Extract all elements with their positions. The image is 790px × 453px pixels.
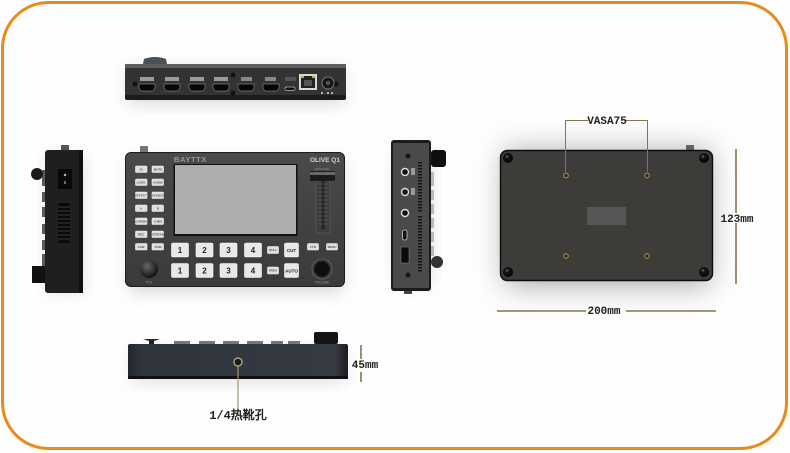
HDMI port row	[139, 77, 296, 91]
top edge keys	[174, 341, 300, 344]
tripod callout	[209, 366, 267, 423]
PTZ joystick	[140, 260, 158, 284]
T-bar fader	[310, 169, 335, 233]
USB-C port	[285, 87, 295, 90]
program and preview keys	[172, 243, 262, 278]
left button grid: CAM	[138, 245, 145, 249]
transition keys: STILL	[269, 248, 277, 252]
depth dimension 45mm	[352, 345, 379, 382]
volume knob	[314, 332, 338, 344]
program and preview keys: 2	[202, 266, 207, 276]
audio jacks	[402, 168, 408, 216]
mount holes	[564, 173, 649, 258]
screen	[174, 164, 298, 236]
top knob	[431, 150, 446, 167]
left button grid: SCENCE	[152, 194, 164, 198]
top knob	[143, 57, 167, 64]
ethernet port	[299, 74, 317, 90]
width dimension 200mm: 200mm	[587, 306, 621, 318]
device right side view	[391, 140, 446, 294]
VASA75 callout	[566, 116, 648, 172]
left button grid: B	[157, 206, 160, 210]
label plate	[587, 207, 626, 225]
USB-A port	[401, 247, 409, 263]
lower knob	[32, 266, 45, 283]
transition keys: AUTO	[285, 268, 298, 274]
program and preview keys: 4	[251, 246, 256, 255]
device rear panel with VESA mounts	[500, 145, 713, 286]
side buttons	[42, 170, 45, 270]
device bottom view	[128, 332, 348, 382]
program and preview keys: 2	[202, 246, 207, 255]
device left side view	[31, 145, 84, 293]
tripod hole	[234, 358, 242, 366]
device front panel	[125, 146, 345, 292]
lower knob	[431, 256, 443, 268]
rubber feet	[503, 153, 709, 277]
left button grid: REC	[138, 232, 145, 236]
left button grid: S.MIX	[154, 220, 162, 224]
joystick	[143, 339, 160, 344]
device top view: rear ports	[125, 57, 346, 104]
program and preview keys: 4	[251, 266, 256, 276]
left button grid: LOGO	[137, 180, 146, 184]
transition keys: FTB	[310, 245, 317, 249]
USB-C port	[402, 230, 407, 240]
height dimension 123mm: 123mm	[720, 214, 754, 226]
small knob	[31, 168, 43, 180]
program and preview keys: 3	[226, 246, 231, 255]
height dimension 123mm	[720, 149, 754, 284]
program and preview keys: 3	[226, 266, 231, 276]
left button grid: EFFECT	[135, 194, 147, 198]
program and preview keys: 1	[178, 246, 183, 255]
power switch	[58, 169, 72, 189]
model name: OLIVE Q1	[310, 157, 340, 164]
transition keys: MENU	[328, 245, 336, 249]
left button grid: CHROM	[135, 220, 147, 224]
depth dimension 45mm: 45mm	[352, 360, 379, 372]
vent dots	[418, 162, 422, 272]
DC power jack	[321, 77, 334, 94]
left button grid: JS	[139, 168, 143, 172]
volume knob	[312, 259, 332, 284]
side keys	[431, 172, 434, 256]
tripod callout: 1/4热靴孔	[209, 407, 267, 423]
left button grid: PGM	[155, 245, 162, 249]
VASA75 callout: VASA75	[587, 116, 627, 128]
PTZ joystick: PTZ	[146, 280, 153, 284]
program and preview keys: 1	[178, 266, 183, 276]
transition keys: CUT	[287, 248, 296, 253]
left button grid: A	[140, 206, 143, 210]
left button grid: STREAM	[152, 232, 165, 236]
left button grid: MUTE	[154, 168, 162, 172]
brand logo: BAYTTX	[174, 155, 207, 164]
transition keys: PREV	[269, 268, 277, 272]
left button grid	[135, 166, 165, 250]
volume knob: VOLUME	[315, 280, 330, 284]
left button grid: AUDIO	[153, 180, 163, 184]
vent slots	[58, 203, 70, 243]
transition keys	[268, 243, 338, 278]
